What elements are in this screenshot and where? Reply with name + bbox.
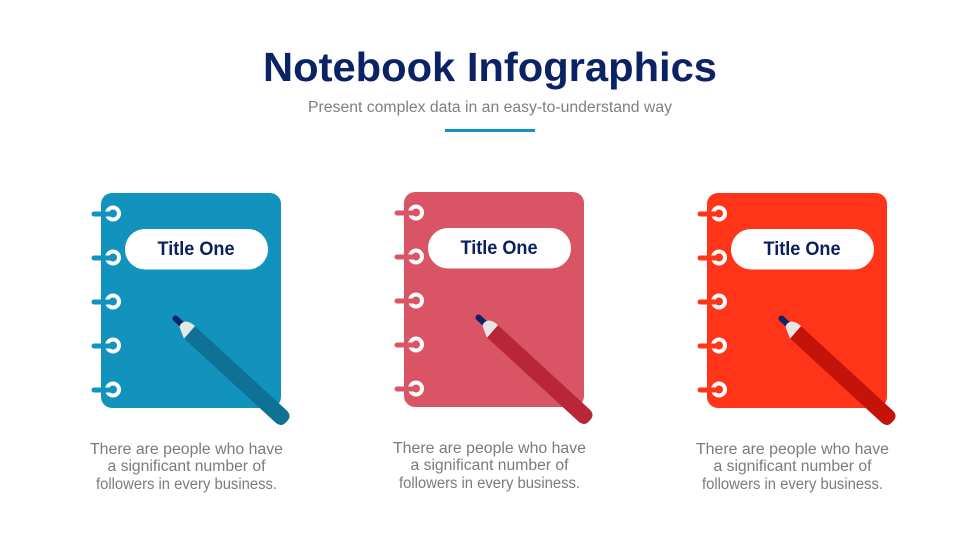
description <box>90 441 283 493</box>
title pill <box>428 228 571 268</box>
panel: rose notebook <box>393 192 595 492</box>
panel: red notebook <box>696 193 898 493</box>
description: a significant number of <box>410 457 569 474</box>
description <box>393 440 586 492</box>
description: followers in every business. <box>702 476 883 493</box>
description: There are people who have <box>696 441 889 458</box>
title pill <box>731 229 874 270</box>
spiral rings <box>94 206 121 398</box>
description: There are people who have <box>90 441 283 458</box>
subtitle: Present complex data in an easy-to-understand way <box>308 99 672 116</box>
icon: pen <box>478 318 595 427</box>
notebook cover <box>101 193 281 408</box>
title: Notebook Infographics <box>263 44 717 90</box>
panel: blue notebook <box>90 193 292 493</box>
spiral rings <box>700 206 727 398</box>
description: followers in every business. <box>96 476 277 493</box>
notebook cover <box>707 193 887 408</box>
pill label: Title One <box>764 239 840 260</box>
description: There are people who have <box>393 440 586 457</box>
spiral rings <box>397 204 424 396</box>
pill label: Title One <box>460 238 538 259</box>
description: a significant number of <box>714 458 872 475</box>
notebook cover <box>404 192 584 407</box>
title pill <box>125 229 268 270</box>
icon: pen <box>782 318 898 428</box>
description: followers in every business. <box>399 475 580 492</box>
icon: pen <box>176 318 292 428</box>
title underline <box>445 129 535 132</box>
description: a significant number of <box>108 458 266 475</box>
description <box>696 441 889 493</box>
pill label: Title One <box>158 239 234 260</box>
